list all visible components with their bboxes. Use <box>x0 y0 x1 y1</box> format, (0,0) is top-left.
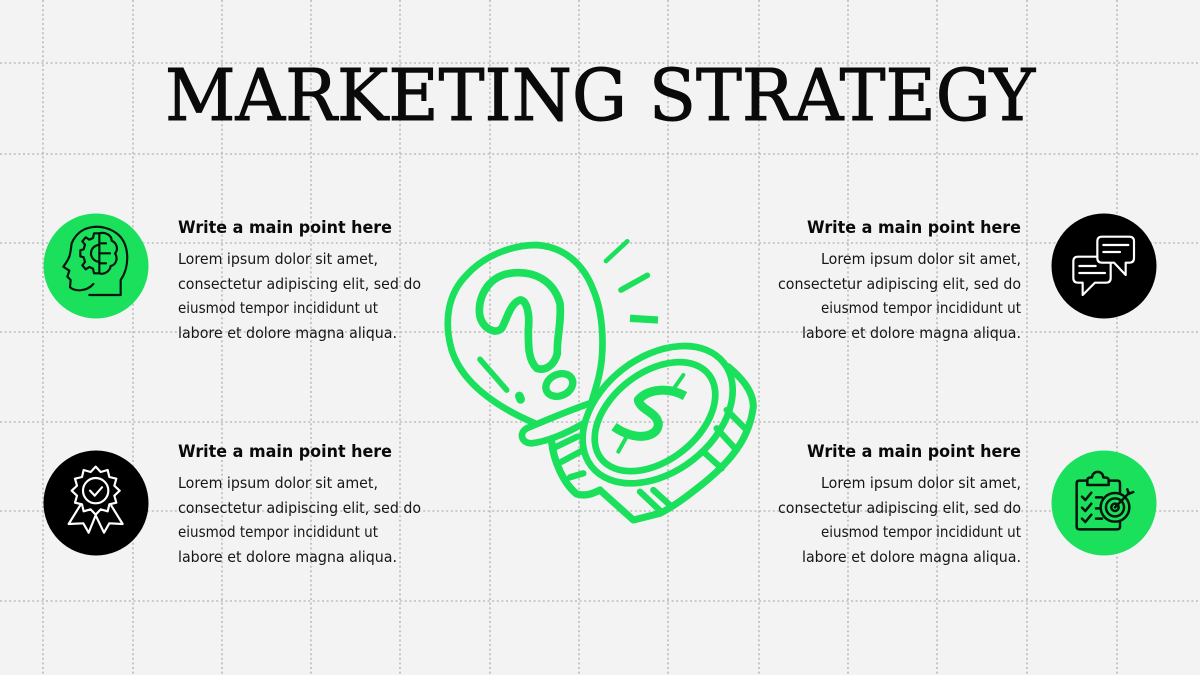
text block <box>778 251 1021 342</box>
bulb outline <box>448 245 602 423</box>
shine rays <box>606 241 627 261</box>
icon: head with gear <box>44 214 148 318</box>
title: MARKETING STRATEGY <box>165 54 1036 137</box>
point: bottom left <box>44 441 421 566</box>
bulb highlights <box>480 359 507 390</box>
text block: consectetur adipiscing elit, sed do <box>778 276 1021 293</box>
text block: eiusmod tempor incididunt ut <box>178 524 378 541</box>
text block: labore et dolore magna aliqua. <box>802 549 1021 566</box>
icon: clipboard with target <box>1052 450 1156 556</box>
text block <box>178 475 421 566</box>
point: top right <box>778 214 1156 342</box>
question dot <box>542 369 577 401</box>
icon: chat bubbles <box>1052 214 1156 318</box>
coin edge <box>602 367 753 520</box>
text block: Lorem ipsum dolor sit amet, <box>178 475 378 492</box>
text block: consectetur adipiscing elit, sed do <box>178 500 421 517</box>
point: bottom right <box>778 441 1156 566</box>
text block: eiusmod tempor incididunt ut <box>178 300 378 317</box>
heading: Write a main point here <box>807 217 1021 237</box>
dollar sign <box>614 390 685 436</box>
heading: Write a main point here <box>807 441 1021 461</box>
text block: Lorem ipsum dolor sit amet, <box>821 251 1021 268</box>
text block: eiusmod tempor incididunt ut <box>821 524 1021 541</box>
text block <box>178 251 421 342</box>
text block: consectetur adipiscing elit, sed do <box>178 276 421 293</box>
heading: Write a main point here <box>178 441 392 461</box>
text block: Lorem ipsum dolor sit amet, <box>178 251 378 268</box>
text block: labore et dolore magna aliqua. <box>178 325 397 342</box>
text block: consectetur adipiscing elit, sed do <box>778 500 1021 517</box>
coin ridges <box>555 410 745 511</box>
text block: labore et dolore magna aliqua. <box>178 549 397 566</box>
point: top left <box>44 214 421 342</box>
coin stack side <box>552 442 600 495</box>
text block: Lorem ipsum dolor sit amet, <box>821 475 1021 492</box>
coin face <box>556 318 759 512</box>
bulb base <box>522 403 590 443</box>
illustration: question bulb and dollar coin <box>448 241 759 520</box>
text block: eiusmod tempor incididunt ut <box>821 300 1021 317</box>
icon: award ribbon <box>44 450 148 556</box>
text block: labore et dolore magna aliqua. <box>802 325 1021 342</box>
heading: Write a main point here <box>178 217 392 237</box>
question mark <box>479 273 560 369</box>
text block <box>778 475 1021 566</box>
